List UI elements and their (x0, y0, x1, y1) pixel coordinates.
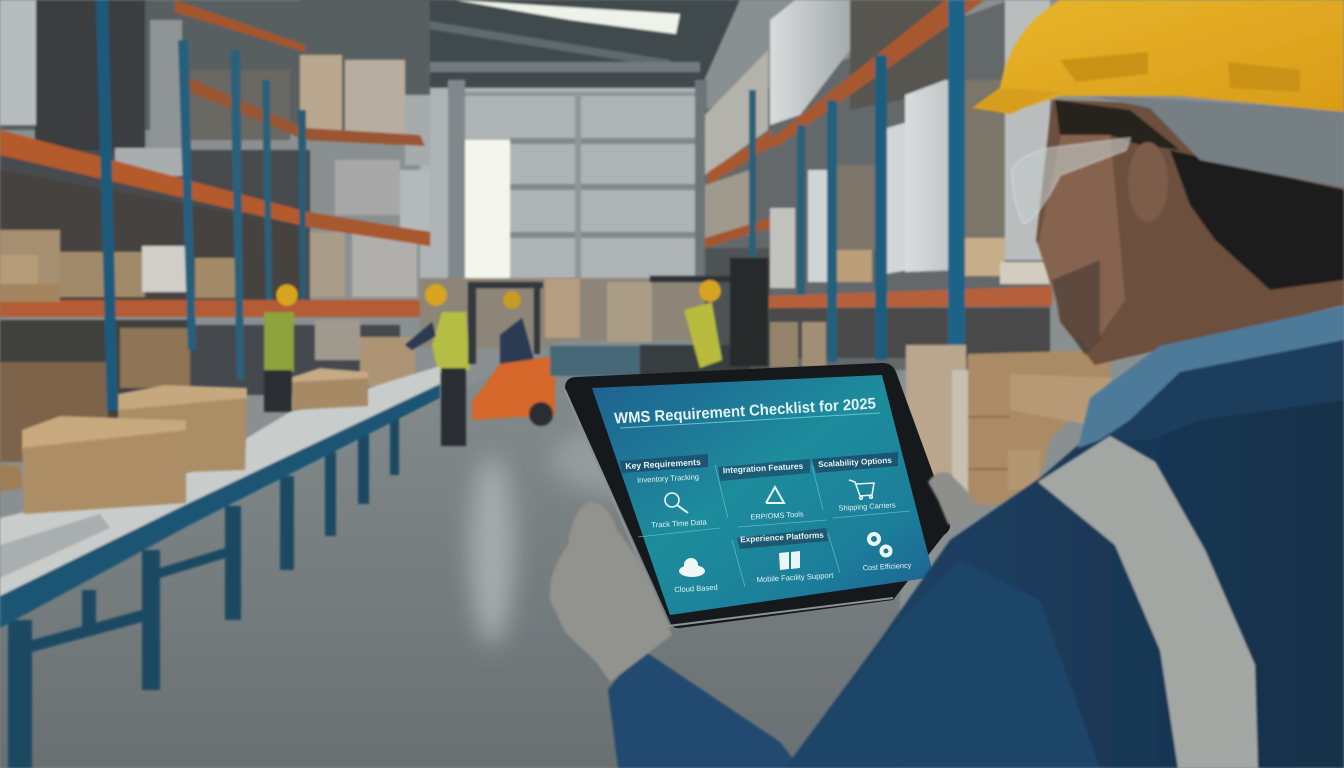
icon: network arrows (766, 487, 784, 503)
section: key requirements: Key Requirements (625, 457, 701, 471)
safety glasses (1012, 138, 1130, 224)
tablet frame (565, 363, 950, 628)
worker: center (405, 284, 470, 446)
worker in foreground (550, 0, 1344, 768)
orange beams (770, 0, 985, 148)
cartons on conveyor (0, 368, 368, 514)
section: key requirements: Track Time Data (651, 517, 708, 530)
helmet strap (1080, 94, 1344, 188)
tablet screen (592, 375, 934, 615)
wrapped pallets (770, 0, 850, 125)
ceiling (300, 0, 740, 90)
section: integration features: Integration Features (723, 461, 804, 475)
icon: cloud (679, 558, 705, 577)
head and neck (1036, 100, 1344, 365)
hair (1170, 150, 1344, 290)
conveyor side rail (0, 384, 440, 628)
section: integration features (718, 459, 810, 522)
floor (0, 340, 900, 768)
worker: left (264, 284, 298, 412)
section: experience platforms: Mobile Facility Support (756, 571, 835, 584)
blue uprights (96, 0, 118, 410)
left pallet rack (0, 0, 430, 462)
screen title: WMS Requirement Checklist for 2025 (614, 395, 877, 428)
icon: book (779, 551, 800, 570)
icon: gears (869, 534, 890, 556)
ear (1128, 142, 1168, 222)
collar (1078, 306, 1344, 448)
right glove (928, 472, 982, 528)
icon: shopping cart (849, 480, 874, 499)
section: cloud based: Cloud Based (674, 583, 718, 594)
sleeve (608, 648, 800, 768)
reflective strip (1038, 436, 1258, 768)
rear goods (545, 278, 580, 338)
cartons on racks (827, 250, 872, 282)
beard shadow (1052, 260, 1100, 355)
carton: front (22, 416, 186, 514)
rear wall (420, 88, 700, 298)
section: cost efficiency (862, 534, 912, 572)
section: cost efficiency: Cost Efficiency (862, 561, 912, 572)
section: key requirements (620, 454, 708, 530)
wrapped pallets on upper level (0, 0, 36, 125)
jacket body (785, 306, 1344, 768)
background workers and forklift (264, 278, 652, 446)
bright doorway (465, 140, 510, 279)
conveyor legs (8, 415, 399, 768)
section: scalability options: Scalability Options (818, 456, 893, 469)
right pallet rack (705, 0, 1112, 505)
forklift (468, 282, 555, 426)
section: integration features: ERP/OMS Tools (750, 509, 804, 522)
section: cloud based (674, 558, 718, 594)
foreground cartons (906, 345, 966, 475)
hard hat (972, 0, 1344, 114)
blue uprights (948, 0, 965, 370)
icon: magnifier (665, 493, 688, 513)
left glove (550, 502, 672, 682)
carton: rear (292, 368, 368, 410)
section: key requirements: Inventory Tracking (637, 472, 699, 485)
skylight (455, 0, 680, 34)
section dividers (638, 465, 910, 587)
section: scalability options: Shipping Carriers (838, 500, 896, 513)
section: scalability options (812, 452, 898, 513)
section: experience platforms (737, 528, 835, 584)
tablet (565, 363, 950, 628)
cartons on middle level (0, 230, 60, 290)
carton: middle (118, 385, 247, 472)
orange beams (0, 130, 308, 227)
forklift operator on the right (640, 258, 768, 375)
belt surface (0, 366, 440, 596)
section: experience platforms: Experience Platforms (740, 531, 825, 544)
conveyor (0, 366, 440, 768)
